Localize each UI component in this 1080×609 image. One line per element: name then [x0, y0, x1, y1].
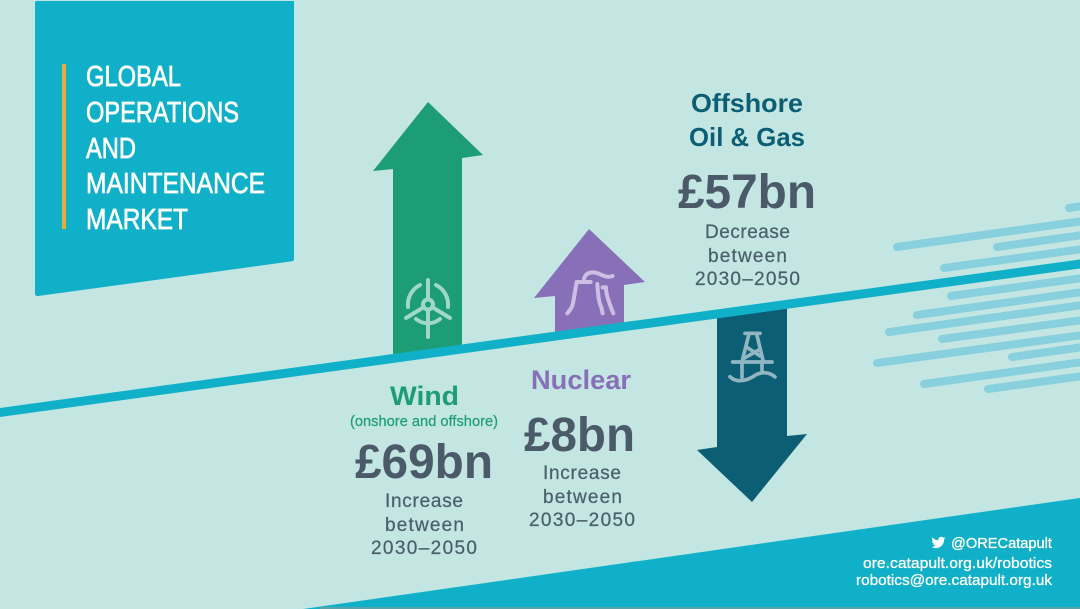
panel: title box [35, 1, 294, 296]
icon: twitter bird [932, 537, 945, 548]
text block: wind: Wind [390, 381, 459, 411]
text block: nuclear: £8bn [524, 409, 635, 462]
text block: wind: between [385, 515, 464, 536]
contact text: @ORECatapult [951, 536, 1052, 552]
text block: offshore oil and gas: between [708, 246, 787, 267]
text block: nuclear: Nuclear [531, 365, 631, 395]
text block: wind [350, 381, 498, 559]
accent bar [62, 64, 66, 229]
title: MAINTENANCE [86, 168, 265, 200]
icon: nuclear cooling towers [567, 272, 613, 313]
title [86, 61, 265, 236]
text block: nuclear: between [543, 487, 622, 508]
baseline: rising teal line [0, 260, 1080, 417]
icon: oil rig [730, 333, 775, 381]
arrow: nuclear increase [534, 229, 645, 340]
text block: offshore oil and gas: Offshore [691, 88, 803, 118]
contact text: ore.catapult.org.uk/robotics [863, 556, 1052, 572]
text block: offshore oil and gas: 2030–2050 [695, 269, 800, 290]
text block: nuclear: 2030–2050 [529, 510, 635, 531]
arrow: wind increase [373, 102, 483, 360]
title: AND [86, 133, 136, 165]
title: MARKET [86, 204, 188, 236]
text block: offshore oil and gas [678, 88, 816, 290]
text block: nuclear [524, 365, 635, 531]
text block: offshore oil and gas: Oil & Gas [689, 122, 805, 152]
title: GLOBAL [86, 61, 181, 93]
text block: wind: (onshore and offshore) [350, 414, 498, 430]
icon: wind turbine [406, 280, 450, 337]
text block: nuclear: Increase [543, 463, 621, 484]
text block: wind: £69bn [355, 436, 493, 489]
contact text: robotics@ore.catapult.org.uk [856, 573, 1053, 589]
footer band with contact details [303, 498, 1080, 609]
text block: offshore oil and gas: £57bn [678, 166, 816, 219]
text block: wind: Increase [385, 491, 463, 512]
text block: wind: 2030–2050 [371, 538, 477, 559]
arrow: offshore oil and gas decrease [697, 302, 807, 502]
contact text [856, 536, 1053, 589]
title: OPERATIONS [86, 97, 239, 129]
text block: offshore oil and gas: Decrease [705, 222, 790, 243]
